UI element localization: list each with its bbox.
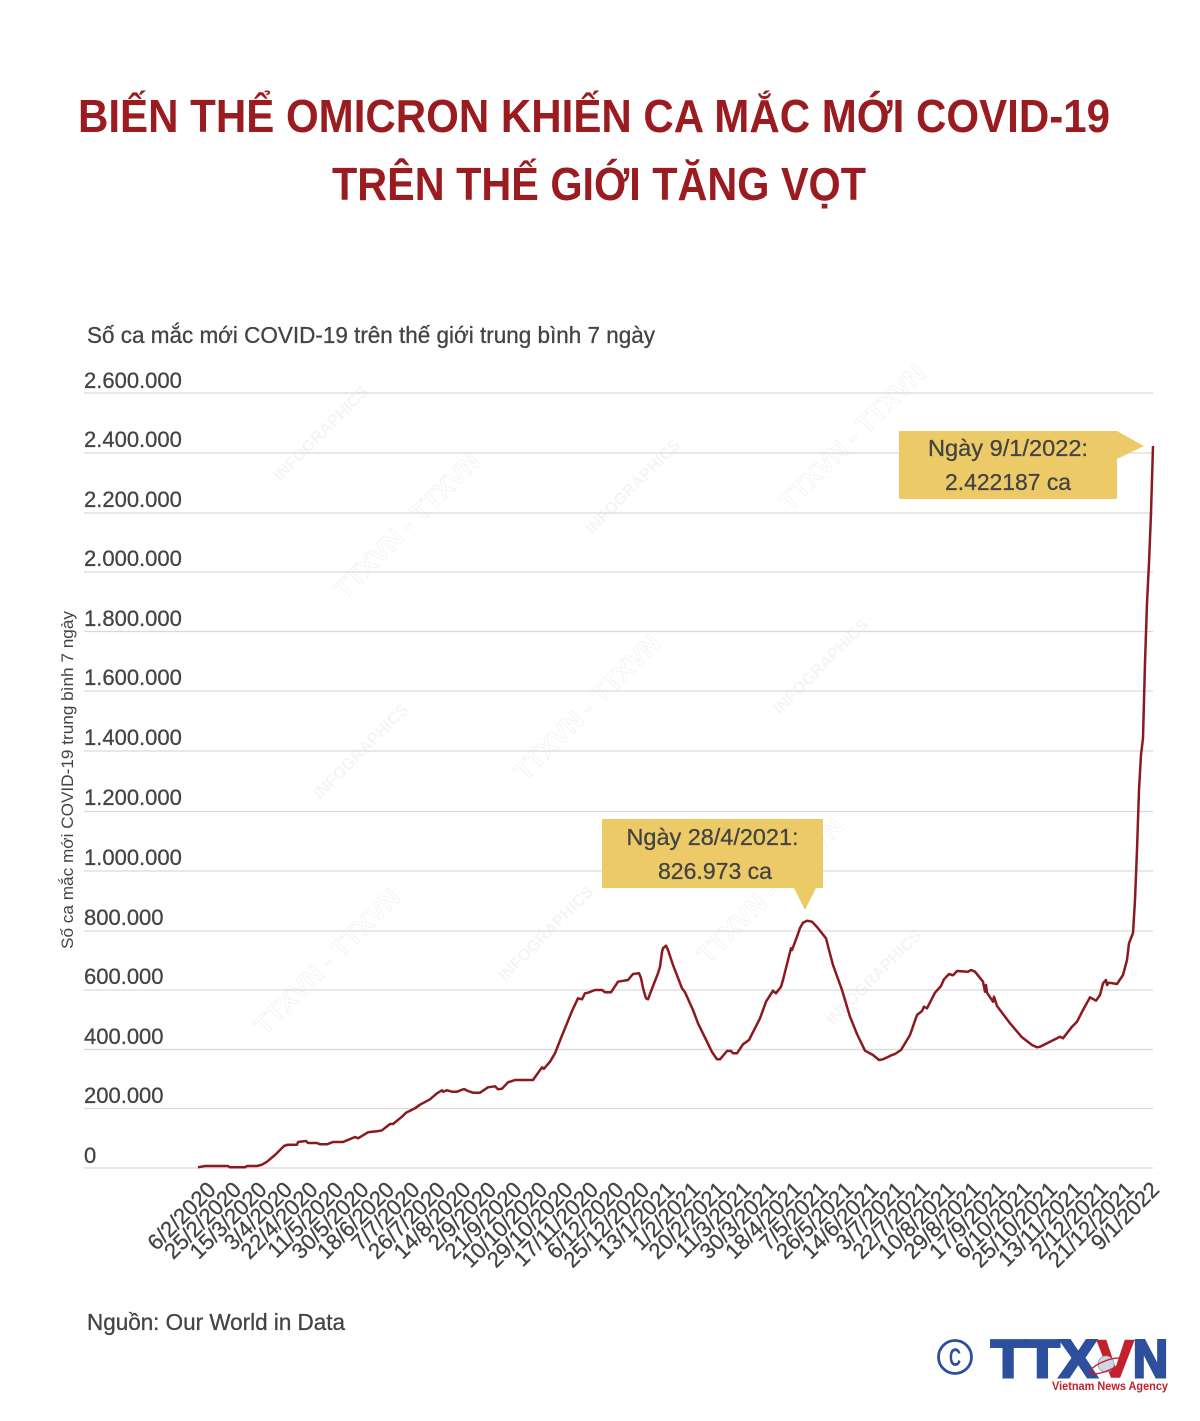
x-axis date labels: 11/5/2020 — [262, 1177, 348, 1263]
x-axis date labels: 18/4/2021 — [720, 1177, 807, 1264]
data line — [198, 446, 1153, 1167]
text: TTXVN - TTXVN — [328, 446, 486, 604]
y-axis tick labels: 2.400.000 — [84, 427, 182, 452]
x-axis date labels: 30/3/2021 — [695, 1177, 782, 1264]
y-axis tick labels: 1.800.000 — [84, 606, 182, 631]
text: INFOGRAPHICS — [582, 436, 684, 538]
x-axis date labels: 7/7/2020 — [346, 1177, 425, 1255]
callout: peak 9/1/2022: 2.422187 ca — [945, 469, 1071, 495]
x-axis date labels: 1/2/2021 — [627, 1177, 705, 1255]
x-axis date labels: 21/12/2021 — [1043, 1177, 1139, 1272]
callout: peak 28/4/2021: Ngày 28/4/2021: — [626, 824, 798, 850]
x-axis date labels: 22/7/2021 — [848, 1177, 935, 1264]
y-axis tick labels: 0 — [84, 1143, 96, 1168]
x-axis date labels: 2/12/2021 — [1026, 1177, 1113, 1264]
x-axis date labels: 17/11/2020 — [509, 1177, 603, 1271]
x-axis date labels: 6/2/2020 — [142, 1177, 221, 1255]
line chart: daily new cases — [58, 368, 1164, 1272]
x-axis date labels: 13/11/2021 — [993, 1177, 1088, 1271]
x-axis date labels: 10/10/2020 — [456, 1177, 552, 1272]
x-axis date labels: 21/9/2020 — [440, 1177, 527, 1264]
x-axis date labels: 9/1/2022 — [1086, 1177, 1164, 1255]
title — [78, 90, 1110, 210]
y-axis tick labels: 1.000.000 — [84, 845, 182, 870]
logo: TTXVN: V — [1097, 1330, 1134, 1389]
x-axis date labels: 15/3/2020 — [185, 1177, 272, 1264]
text: TTXVN - TTXVN — [773, 358, 931, 516]
y-axis tick labels: 2.200.000 — [84, 487, 182, 512]
y-axis tick labels — [84, 368, 182, 1168]
y-axis tick labels: 400.000 — [84, 1024, 164, 1049]
x-axis date labels: 11/3/2021 — [670, 1177, 756, 1263]
y-axis tick labels: 1.600.000 — [84, 665, 182, 690]
x-axis date labels: 25/10/2021 — [966, 1177, 1062, 1272]
x-axis date labels: 3/4/2020 — [219, 1177, 297, 1255]
text: TTXVN - TTXVN — [508, 628, 666, 786]
title: BIẾN THỂ OMICRON KHIẾN CA MẮC MỚI COVID-19 — [78, 90, 1110, 142]
icon: copyright symbol — [938, 1340, 972, 1374]
callout: peak 28/4/2021 — [602, 819, 823, 910]
gridlines — [84, 393, 1153, 1168]
x-axis date labels: 30/5/2020 — [287, 1177, 374, 1264]
y-axis tick labels: 1.400.000 — [84, 725, 182, 750]
y-axis tick labels: 2.000.000 — [84, 546, 182, 571]
logo: TTXVN — [991, 1330, 1169, 1393]
x-axis date labels: 6/10/2021 — [950, 1177, 1037, 1264]
x-axis date labels — [142, 1177, 1164, 1272]
text: INFOGRAPHICS — [770, 616, 872, 718]
callout: peak 9/1/2022 — [899, 431, 1144, 499]
y-axis title: Số ca mắc mới COVID-19 trung bình 7 ngày — [58, 610, 77, 949]
x-axis date labels: 29/10/2020 — [482, 1177, 578, 1272]
x-axis date labels: 3/7/2021 — [831, 1177, 909, 1255]
x-axis date labels: 26/5/2021 — [771, 1177, 858, 1264]
chart subtitle: Số ca mắc mới COVID-19 trên thế giới trung bình 7 ngày — [87, 322, 655, 348]
y-axis tick labels: 800.000 — [84, 905, 164, 930]
x-axis date labels: 20/2/2021 — [644, 1177, 731, 1264]
y-axis tick labels: 2.600.000 — [84, 368, 182, 393]
icon: copyright symbol: C — [949, 1344, 961, 1372]
text: TTXVN - TTXVN — [248, 882, 406, 1040]
title: TRÊN THẾ GIỚI TĂNG VỌT — [332, 158, 866, 210]
y-axis tick labels: 1.200.000 — [84, 785, 182, 810]
callout: peak 9/1/2022: Ngày 9/1/2022: — [928, 435, 1088, 461]
y-axis tick labels: 200.000 — [84, 1083, 164, 1108]
x-axis date labels: 17/9/2021 — [924, 1177, 1011, 1264]
x-axis date labels: 25/2/2020 — [159, 1177, 246, 1264]
x-axis date labels: 18/6/2020 — [312, 1177, 399, 1264]
x-axis date labels: 6/12/2020 — [542, 1177, 629, 1264]
logo: TTXVN: N — [1133, 1330, 1168, 1389]
callout: peak 28/4/2021: 826.973 ca — [658, 858, 772, 884]
text: INFOGRAPHICS — [310, 701, 412, 803]
text: INFOGRAPHICS — [823, 927, 925, 1029]
x-axis date labels: 14/6/2021 — [797, 1177, 884, 1264]
x-axis date labels: 29/8/2021 — [899, 1177, 986, 1264]
x-axis date labels: 22/4/2020 — [236, 1177, 323, 1264]
x-axis date labels: 26/7/2020 — [363, 1177, 450, 1264]
text: INFOGRAPHICS — [270, 383, 372, 485]
x-axis date labels: 10/8/2021 — [873, 1177, 960, 1264]
text: TTXVN - TTXVN — [691, 811, 849, 969]
x-axis date labels: 14/8/2020 — [389, 1177, 476, 1264]
logo: TTXVN: TTX — [991, 1330, 1097, 1389]
logo: TTXVN: Vietnam News Agency — [1052, 1381, 1169, 1393]
x-axis date labels: 7/5/2021 — [754, 1177, 833, 1255]
source note: Nguồn: Our World in Data — [87, 1309, 345, 1335]
text: INFOGRAPHICS — [495, 883, 597, 985]
x-axis date labels: 13/1/2021 — [593, 1177, 680, 1264]
x-axis date labels: 25/12/2020 — [558, 1177, 654, 1272]
y-axis tick labels: 600.000 — [84, 964, 164, 989]
x-axis date labels: 2/9/2020 — [423, 1177, 501, 1255]
